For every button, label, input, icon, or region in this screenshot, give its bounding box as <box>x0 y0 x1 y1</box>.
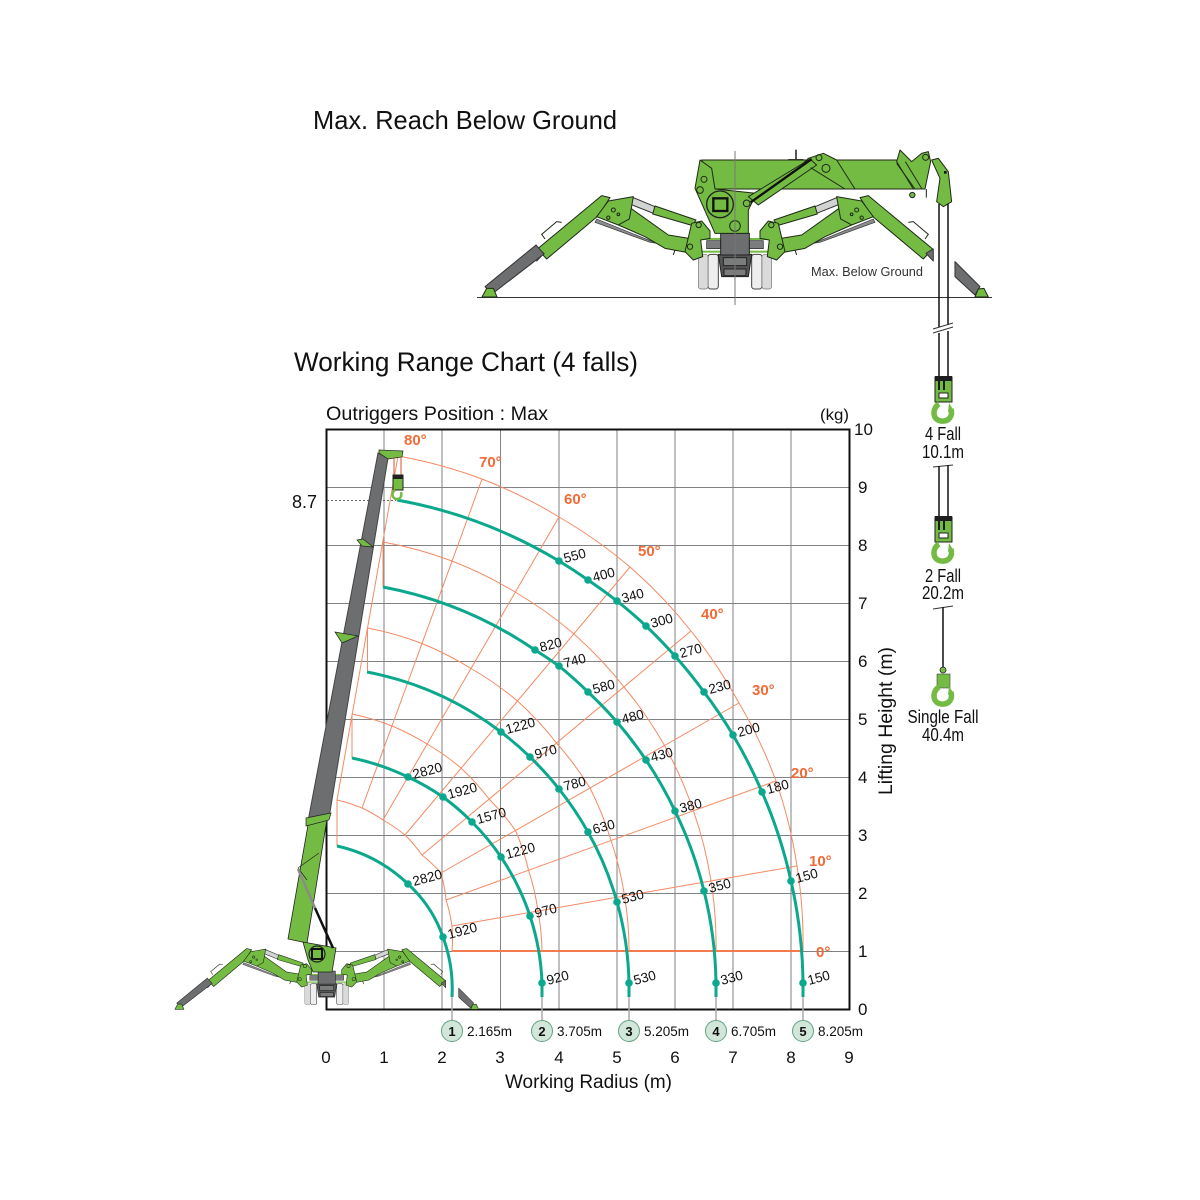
load curve 2: 3.705 m: 970 <box>533 901 559 921</box>
y axis ticks: 0 <box>858 1000 867 1019</box>
crane illustration: max below ground <box>477 150 992 305</box>
hook ropes <box>394 457 401 477</box>
load curve 4: 6.705 m: 480 <box>620 707 646 727</box>
crane in working position <box>175 450 479 1009</box>
load curve 5: 8.205 m: 230 <box>707 677 733 697</box>
angle labels: 10° <box>809 853 832 870</box>
angle labels: 20° <box>791 765 814 782</box>
angle labels: 40° <box>701 606 724 623</box>
y axis ticks: 8 <box>858 536 867 555</box>
single fall hook: Single Fall <box>908 707 978 727</box>
load curve 2: 3.705 m: 920 <box>545 968 571 988</box>
boom angle rays <box>337 456 797 926</box>
load curve 4: 6.705 m: 330 <box>719 968 745 988</box>
outriggers and base <box>175 948 479 1009</box>
telescopic boom <box>308 453 388 821</box>
x axis ticks <box>321 1048 854 1067</box>
four fall hook: 10.1m <box>922 442 964 462</box>
ground line <box>477 296 992 298</box>
hook <box>393 490 401 499</box>
single fall hook: 40.4m <box>922 725 964 745</box>
radius markers: 2.165m <box>467 1024 512 1039</box>
y axis ticks: 5 <box>858 710 867 729</box>
load curve 5: 8.205 m: 200 <box>736 720 762 740</box>
load curve 4: 6.705 m <box>383 587 745 997</box>
x axis ticks: 5 <box>612 1048 622 1067</box>
two fall hook: 2 Fall <box>925 566 961 586</box>
chart frame <box>326 430 850 1010</box>
two fall hook: 20.2m <box>922 583 964 603</box>
radius arcs <box>337 456 803 951</box>
load curve 5: 8.205 m: 150 <box>806 968 832 988</box>
height value: 8.7 <box>292 492 317 512</box>
y axis ticks: 1 <box>858 942 867 961</box>
load curve 3: 5.205 m <box>367 672 658 997</box>
load curve 1: 2.165 m: 1920 <box>446 920 479 942</box>
x axis ticks: 9 <box>844 1048 854 1067</box>
y axis ticks: 4 <box>858 768 867 787</box>
hoist ropes and hooks with fall lengths <box>908 204 978 745</box>
y axis ticks: 3 <box>858 826 867 845</box>
x axis ticks: 7 <box>728 1048 738 1067</box>
zero degree line <box>452 950 803 952</box>
unit label: (kg) <box>820 407 849 424</box>
radius markers: 1 <box>448 1024 456 1039</box>
angle labels: 60° <box>564 491 587 508</box>
x axis ticks: 1 <box>379 1048 389 1067</box>
load curve 5: 8.205 m: 150 <box>794 866 820 886</box>
radius markers <box>442 997 863 1042</box>
load curve 4: 6.705 m: 580 <box>591 677 617 697</box>
load curve 2: 3.705 m <box>352 758 571 997</box>
boom brackets <box>357 539 373 547</box>
boom head <box>379 450 403 459</box>
load curve 5: 8.205 m: 340 <box>620 586 646 606</box>
radius markers: 4 <box>712 1024 720 1039</box>
radius markers: 6.705m <box>731 1024 776 1039</box>
load curve 2: 3.705 m: 1570 <box>475 805 508 827</box>
working range chart <box>175 420 897 1093</box>
load curve 5: 8.205 m: 180 <box>765 777 791 797</box>
y axis ticks: 6 <box>858 652 867 671</box>
radius markers: 2 <box>538 1024 546 1039</box>
grid <box>326 429 849 1009</box>
load curve 5: 8.205 m: 300 <box>649 611 675 631</box>
radius markers: 5 <box>799 1024 807 1039</box>
luffing cylinder <box>298 869 315 908</box>
x axis ticks: 6 <box>670 1048 680 1067</box>
heading: working range chart: Working Range Chart (4 falls) <box>294 347 638 377</box>
turret <box>303 942 336 972</box>
angle labels: 30° <box>752 682 775 699</box>
lower boom <box>288 819 327 943</box>
hook block <box>393 475 403 490</box>
load curve 4: 6.705 m: 820 <box>538 635 564 655</box>
angle labels: 70° <box>479 454 502 471</box>
load curve 2: 3.705 m: 1920 <box>446 780 479 802</box>
radius markers: 3 <box>625 1024 633 1039</box>
y axis ticks: 9 <box>858 478 867 497</box>
x axis ticks: 4 <box>554 1048 564 1067</box>
four fall hook <box>922 204 964 462</box>
y axis title: Lifting Height (m) <box>876 647 897 795</box>
height marker <box>327 500 396 502</box>
crane drawing <box>482 150 988 297</box>
load curve 2: 3.705 m: 1220 <box>504 840 537 862</box>
load curve 5: 8.205 m: 270 <box>678 641 704 661</box>
x axis ticks: 3 <box>495 1048 505 1067</box>
angle labels: 0° <box>816 944 830 961</box>
load curve 3: 5.205 m: 530 <box>620 887 646 907</box>
load curve 3: 5.205 m: 1220 <box>504 715 537 737</box>
load curve 4: 6.705 m: 430 <box>649 745 675 765</box>
load curve 3: 5.205 m: 970 <box>533 742 559 762</box>
centre line <box>734 151 736 305</box>
load curve 5: 8.205 m: 400 <box>591 565 617 585</box>
load curve 1: 2.165 m: 2820 <box>411 867 444 889</box>
title: max reach below ground: Max. Reach Below Ground <box>313 105 617 135</box>
y axis ticks: 2 <box>858 884 867 903</box>
load curve 4: 6.705 m: 740 <box>562 651 588 671</box>
four fall hook: 4 Fall <box>925 424 961 444</box>
x axis ticks: 0 <box>321 1048 331 1067</box>
load curve 3: 5.205 m: 780 <box>562 774 588 794</box>
load curve 4: 6.705 m: 350 <box>707 876 733 896</box>
angle labels <box>404 432 832 961</box>
radius markers: 8.205m <box>818 1024 863 1039</box>
angle labels: 80° <box>404 432 427 449</box>
x axis title: Working Radius (m) <box>505 1072 672 1093</box>
slew ring <box>309 946 325 962</box>
y axis ticks: 7 <box>858 594 867 613</box>
load curve 4: 6.705 m: 380 <box>678 796 704 816</box>
y axis ticks <box>854 420 873 1019</box>
label: max below ground: Max. Below Ground <box>811 264 923 279</box>
load curve 2: 3.705 m: 2820 <box>411 760 444 782</box>
x axis ticks: 8 <box>786 1048 796 1067</box>
radius markers: 3.705m <box>557 1024 602 1039</box>
x axis ticks: 2 <box>437 1048 447 1067</box>
load curve 1: 2.165 m <box>337 846 479 997</box>
two fall hook <box>922 465 964 603</box>
load curve 5: 8.205 m <box>397 500 832 997</box>
chart subtitle: Outriggers Position : Max <box>326 404 549 425</box>
load curve 5: 8.205 m: 550 <box>562 546 588 566</box>
load curve 3: 5.205 m: 630 <box>591 817 617 837</box>
load curve 3: 5.205 m: 530 <box>632 968 658 988</box>
single fall hook <box>908 606 978 745</box>
radius markers: 5.205m <box>644 1024 689 1039</box>
y axis ticks: 10 <box>854 420 873 439</box>
angle labels: 50° <box>638 543 661 560</box>
